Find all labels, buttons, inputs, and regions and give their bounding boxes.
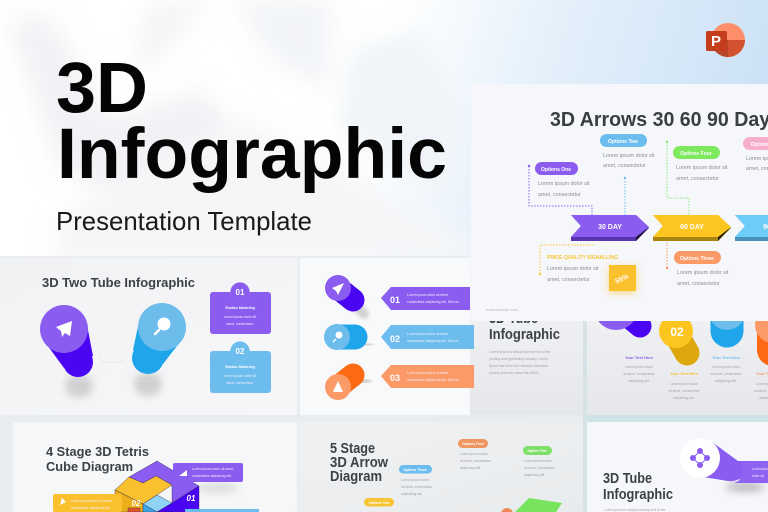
body text: ipsum has been the industry's standard (489, 364, 548, 368)
option: green: adipiscing elit. (524, 473, 545, 477)
arrow: 30 day (571, 215, 649, 241)
option two: Options Two (608, 139, 638, 145)
body text lower: Lorem ipsum is simply dummy text of the (604, 508, 666, 512)
cube numbers: 02 (132, 499, 141, 508)
body text: Lorem ipsum is simply dummy text of the (489, 350, 551, 354)
tube: orange (755, 307, 768, 350)
body text: printing and typesetting industry. Lorem (489, 357, 548, 361)
text column 3: Your Text Here (712, 355, 741, 360)
body text (489, 350, 551, 375)
icon: network (690, 448, 710, 468)
panel: 4 Stage 3D Tetris Cube Diagram (13, 422, 297, 512)
yellow label: consectetur adipiscing elit (71, 506, 110, 510)
text column 3: Lorem ipsum dolor (712, 365, 741, 369)
cube (115, 461, 199, 512)
option: blue: adipiscing elit. (401, 492, 422, 496)
price-quality text: amet, consectetur (547, 277, 590, 283)
tube: blue (709, 294, 745, 331)
purple label: Lorem ipsum dolor sit amet, (192, 467, 234, 471)
purple label: consectetur adipiscing elit. (192, 474, 232, 478)
callout 02: Lorem ipsum dolor sit (224, 374, 256, 378)
heading: 5 stage: Diagram (330, 469, 382, 485)
main title (56, 49, 447, 194)
blue label (185, 509, 259, 512)
heading: lower tube (603, 471, 673, 503)
callout 01: amet, consectetur (227, 322, 254, 326)
text column 3: adipiscing elit. (715, 379, 737, 383)
55% tile (609, 265, 636, 293)
option two (600, 134, 655, 169)
arrow: 30 day: 30 DAY (598, 224, 622, 231)
option two: amet, consectetur (603, 163, 646, 169)
icon: PowerPoint logo: P (711, 33, 721, 50)
heading: tetris: 4 Stage 3D Tetris (46, 445, 149, 459)
callout 02: amet, consectetur (227, 381, 254, 385)
text column 2 (668, 371, 701, 400)
option four (673, 146, 728, 182)
option: green: sit amet, consectetur (524, 466, 556, 470)
option three: amet, consectetur (677, 281, 720, 287)
arrow label 02: consectetur adipiscing elit. Sed do (407, 339, 459, 343)
subtitle: Presentation Template (56, 206, 312, 236)
heading: tetris (46, 445, 149, 474)
panel: tubes with text (587, 258, 768, 415)
arrow label 01 (381, 287, 470, 310)
heading: 5 stage (330, 441, 389, 485)
arrow label 03: 03 (390, 373, 400, 383)
option one: amet, consectetur (538, 192, 581, 198)
heading: 3D Tube Infographic: Infographic (489, 326, 560, 343)
main title: Infographic (57, 115, 447, 194)
text column 1: adipiscing elit. (628, 379, 650, 383)
callout 02: 02 (236, 347, 245, 356)
tube with white cap (680, 438, 768, 492)
text column 1: Your Text Here (625, 355, 654, 360)
arrow label 03: Lorem ipsum dolor sit amet, (407, 371, 449, 375)
connectors (528, 141, 689, 275)
price-quality text: Lorem ipsum dolor sit (547, 266, 599, 272)
option: orange: sit amet, consectetur (460, 459, 492, 463)
option one (535, 162, 590, 198)
price-quality text: PRICE-QUALITY SIGNALLING (547, 255, 618, 261)
text column 1: sit amet, consectetur (623, 372, 656, 376)
option: blue: Lorem ipsum dolor (401, 478, 430, 482)
purple label (173, 463, 243, 482)
callout 02: Shoklur Marketing (225, 365, 255, 369)
tube: yellow (659, 314, 693, 353)
tube row 1 (325, 275, 364, 314)
option one: Options One (541, 167, 571, 173)
heading: tetris: Cube Diagram (46, 460, 133, 474)
arrow: 90 day (735, 215, 768, 241)
option three (674, 251, 729, 287)
main title: 3D (56, 49, 148, 128)
option five (743, 137, 768, 172)
cube numbers: 01 (187, 494, 196, 503)
text column 2: adipiscing elit. (673, 396, 695, 400)
option: green: Lorem ipsum dolor (524, 459, 553, 463)
tube row 3 (325, 374, 366, 400)
tube: purple (40, 305, 93, 377)
tube row 2 (324, 324, 368, 350)
callout 01: 01 (236, 288, 245, 297)
option: green: Option Five (527, 449, 547, 453)
option: green (523, 446, 556, 477)
text column 1: Lorem ipsum dolor (625, 365, 654, 369)
3D arrow: green and orange (501, 498, 562, 512)
text column 2: Your Text Here (670, 371, 699, 376)
option: orange (458, 439, 492, 470)
text column 4 (754, 371, 768, 400)
panel: 3D Two Tube Infographic (0, 258, 297, 415)
tube shadows (59, 340, 167, 398)
website: www.website.com (486, 307, 518, 312)
panel: 3D Arrows 30 60 90 Days (471, 84, 768, 321)
callout 01 (210, 282, 271, 334)
tube with white cap: dolor sit (752, 474, 764, 478)
option: orange: Options Four (462, 442, 485, 446)
heading: 3D Tube Infographic: 3D Tube (489, 310, 538, 327)
arrow label 01: consectetur adipiscing elit. Sed do (407, 300, 459, 304)
tube: blue (132, 303, 186, 374)
arrow label 02 (381, 325, 474, 349)
arrow label 02: Lorem ipsum dolor sit amet, (407, 332, 449, 336)
text column 2: sit amet, consectetur (668, 389, 701, 393)
option four: amet, consectetur (676, 176, 719, 182)
text column 1 (623, 355, 656, 383)
arrow label 03 (381, 365, 474, 388)
option: blue: sit amet, consectetur (401, 485, 433, 489)
icon: PowerPoint logo (706, 23, 745, 57)
body text: dummy text ever since the 1500s. (489, 371, 540, 375)
callout 02 (210, 342, 271, 393)
tube: yellow: 02 (670, 325, 684, 339)
heading: 5 stage: 3D Arrow (330, 455, 389, 471)
option two: Lorem ipsum dolor sit (603, 153, 655, 159)
icon: magnifier (155, 318, 170, 334)
arrow label 01: 01 (390, 295, 400, 305)
text column 2: Lorem ipsum dolor (670, 382, 699, 386)
arrow label 01: Lorem ipsum dolor sit amet, (407, 293, 449, 297)
option: blue (399, 465, 433, 496)
panel: 5 Stage 3D Arrow Diagram (300, 422, 583, 512)
yellow label: Lorem ipsum dolor sit amet (71, 499, 112, 503)
55% tile: 55% (614, 273, 631, 286)
arrow label 03: consectetur adipiscing elit. Sed do (407, 378, 459, 382)
heading: 3D Tube Infographic (489, 310, 560, 343)
option one: Lorem ipsum dolor sit (538, 181, 590, 187)
text column 3 (710, 355, 743, 383)
option: yellow: Options Two (369, 501, 389, 505)
heading: lower tube: 3D Tube (603, 471, 652, 487)
option four: Options Four (680, 151, 712, 157)
price-quality text (547, 255, 618, 283)
yellow label (53, 494, 122, 512)
heading: two tube: 3D Two Tube Infographic (42, 276, 195, 290)
callout 01: Lorem ipsum dolor sit (224, 315, 256, 319)
option three: Options Three (680, 256, 714, 262)
cube numbers (132, 494, 196, 508)
heading: lower tube: Infographic (603, 487, 673, 503)
icon: paper plane (56, 321, 72, 337)
panel: 3D Tube Infographic (lower) (587, 422, 768, 512)
option four: Lorem ipsum dolor sit (676, 165, 728, 171)
arrow label 02: 02 (390, 334, 400, 344)
option: blue: Options Three (403, 468, 427, 472)
callout 01: Shoklur Marketing (225, 306, 255, 310)
option three: Lorem ipsum dolor sit (677, 270, 729, 276)
panel: three tubes (300, 258, 583, 415)
arrow: 60 day (653, 215, 731, 241)
text column 3: sit amet, consectetur (710, 372, 743, 376)
tube: purple (594, 286, 640, 330)
option: yellow (364, 498, 394, 506)
arrow: 60 day: 60 DAY (680, 224, 704, 231)
label shadow (196, 483, 240, 493)
option: orange: adipiscing elit. (460, 466, 481, 470)
heading: 5 stage: 5 Stage (330, 441, 375, 457)
option: orange: Lorem ipsum dolor (460, 452, 489, 456)
